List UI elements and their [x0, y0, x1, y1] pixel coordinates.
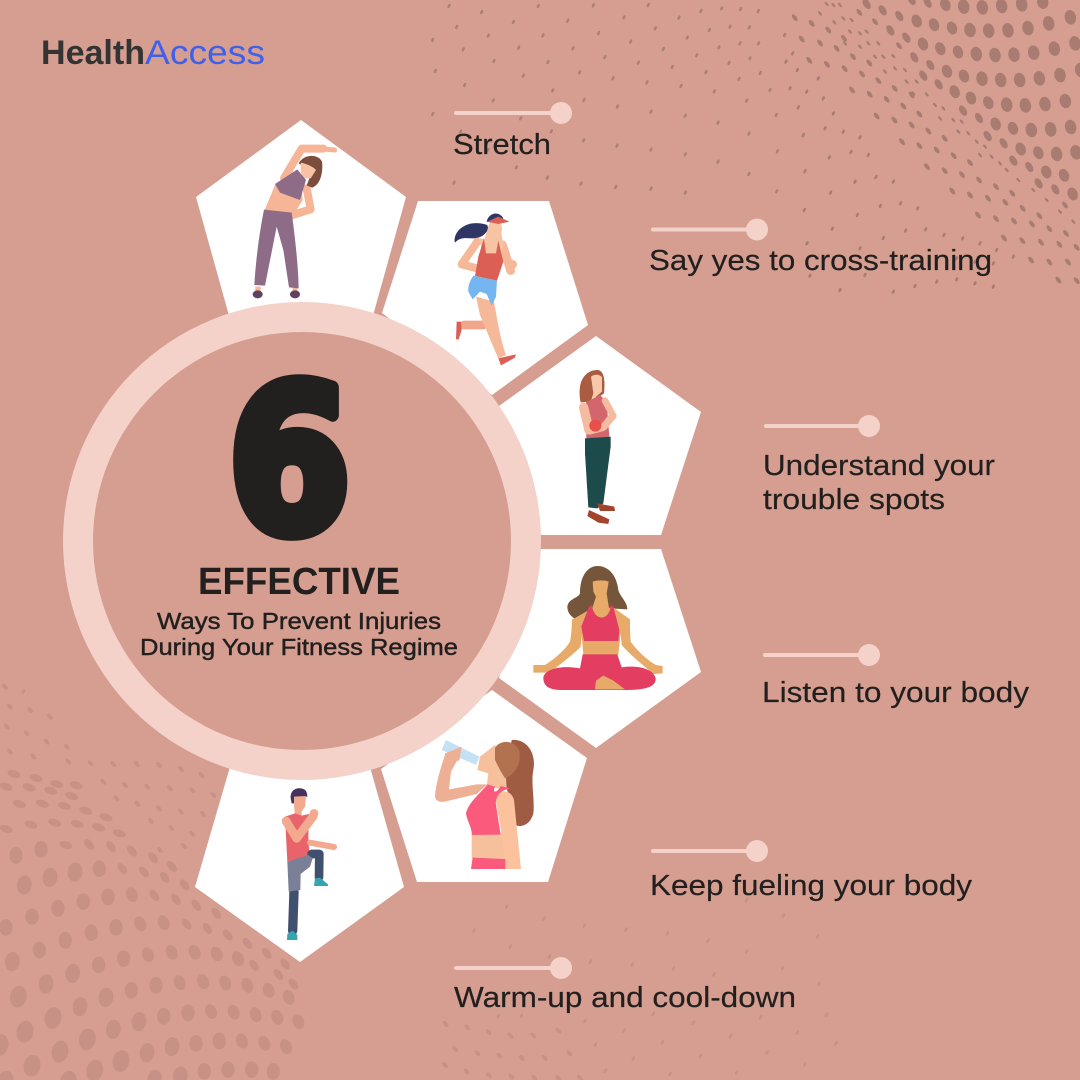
icon: man warming up — [285, 788, 334, 940]
label: stretch: Stretch — [453, 129, 551, 161]
icon: woman stretching — [253, 149, 335, 298]
panel: warm-up — [195, 760, 404, 962]
panel: cross-training — [382, 201, 588, 395]
icon: woman running — [455, 214, 517, 365]
label: cross-training: Say yes to cross-training — [649, 245, 992, 277]
big number 6: 6 — [228, 343, 351, 579]
icon: woman with stomach pain — [580, 370, 615, 524]
logo: Health — [41, 34, 145, 72]
panel: stretch — [196, 120, 406, 330]
icon: woman drinking water — [435, 740, 534, 869]
heading: EFFECTIVE — [198, 561, 400, 603]
logo — [41, 34, 265, 72]
label: listen — [762, 644, 1030, 709]
label: cross-training — [649, 218, 992, 277]
panel: listen to body — [499, 549, 701, 748]
panel: fueling — [381, 690, 587, 882]
logo: Access — [145, 34, 265, 72]
label: fueling — [650, 840, 973, 902]
label: stretch — [453, 102, 572, 161]
subheading: During Your Fitness Regime — [140, 634, 458, 660]
label: fueling: Keep fueling your body — [650, 870, 973, 902]
label: trouble spots: trouble spots — [763, 484, 945, 516]
center circle — [63, 302, 541, 780]
subheading: Ways To Prevent Injuries — [157, 608, 441, 634]
label: trouble spots: Understand your — [763, 450, 995, 482]
panel: trouble spots — [499, 336, 701, 535]
icon: woman meditating — [533, 566, 663, 690]
label: listen: Listen to your body — [762, 677, 1030, 709]
label: trouble spots — [763, 415, 995, 516]
subheading — [140, 608, 458, 660]
label: warm-up — [454, 957, 796, 1014]
label: warm-up: Warm-up and cool-down — [454, 982, 796, 1014]
